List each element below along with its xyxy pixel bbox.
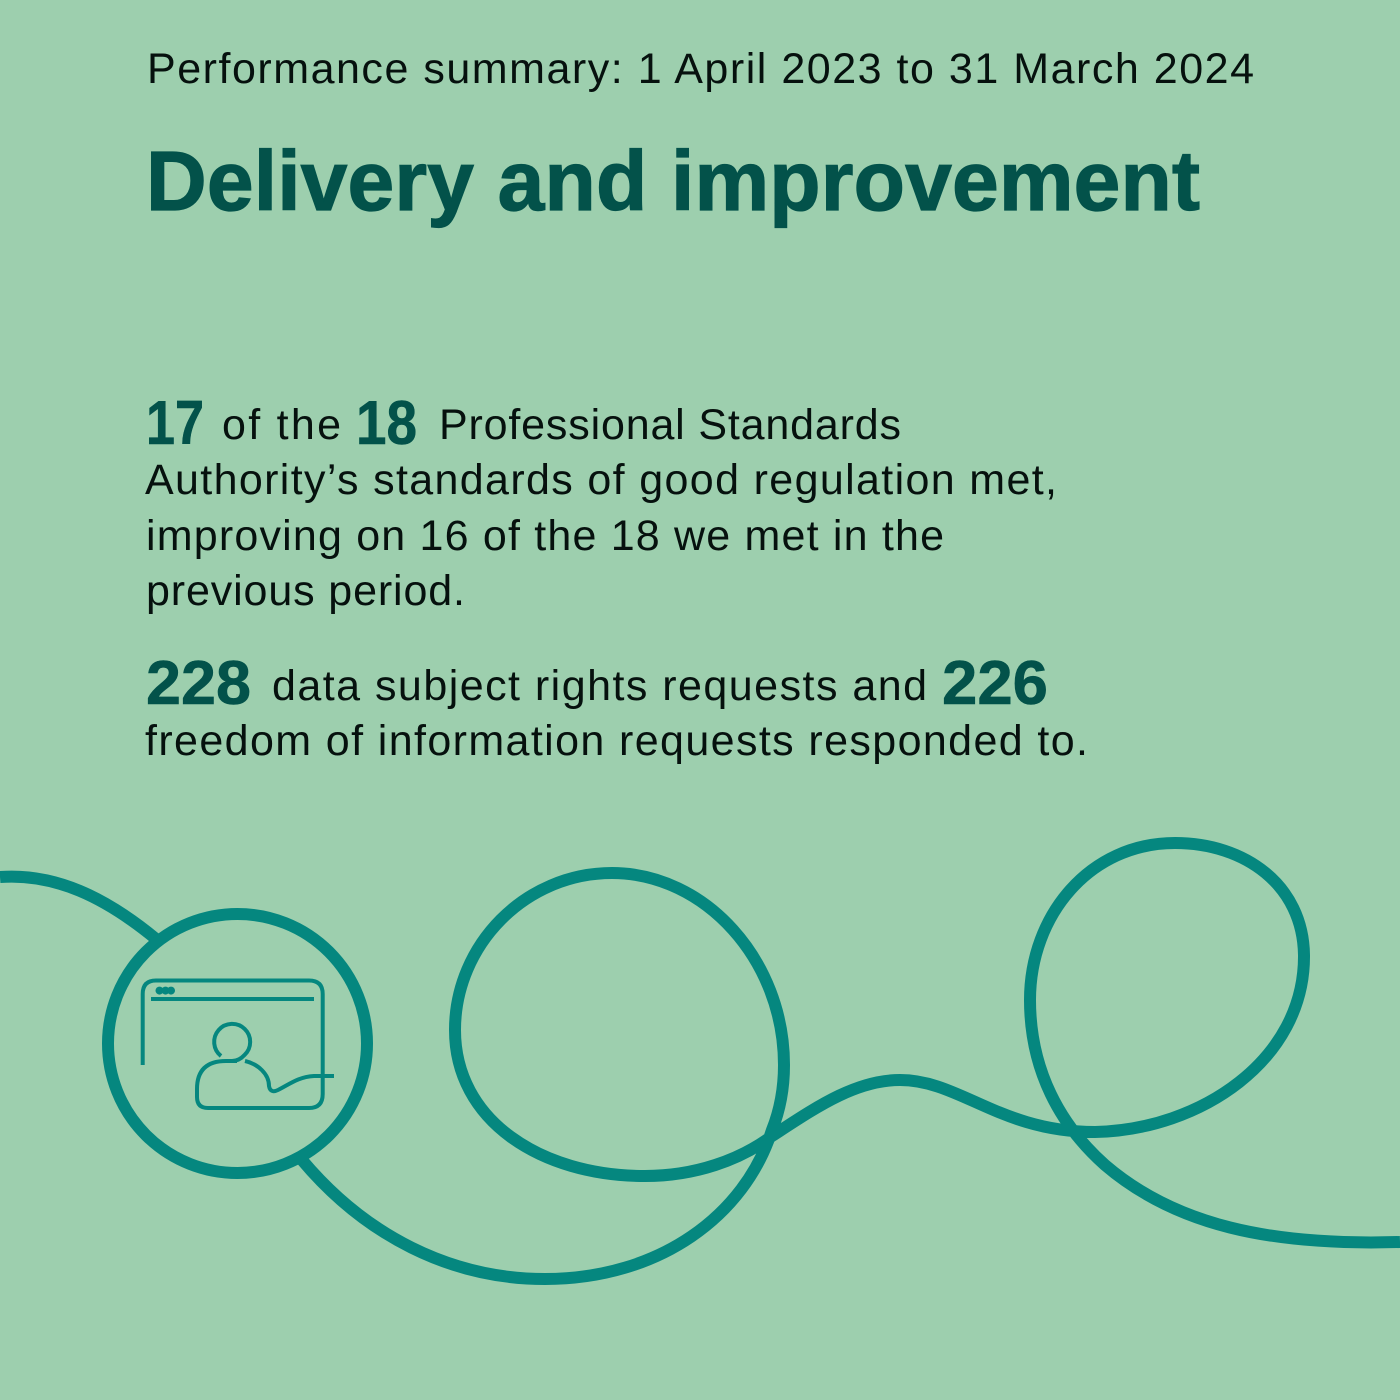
title: Delivery and improvement: [146, 134, 1200, 228]
stat: 17: 17: [146, 389, 204, 458]
person head: [214, 1024, 250, 1061]
text block: information requests: [145, 649, 1088, 765]
stat: 226: 226: [942, 649, 1048, 718]
text line 2: Authority’s standards of good regulation met,: [145, 456, 1057, 504]
stat: 18: 18: [356, 389, 417, 458]
text line 4: previous period.: [146, 567, 465, 615]
browser toolbar line: [151, 997, 314, 1001]
icon: person at browser window in circle: [108, 914, 367, 1173]
decorative looping line: [0, 843, 1400, 1279]
browser dots: [156, 987, 175, 995]
text: data subject rights requests and: data subject rights requests and: [272, 662, 927, 710]
text: of the: of the: [222, 401, 341, 449]
browser window outline: [143, 980, 323, 1108]
text line 2: freedom of information requests responded to.: [145, 717, 1088, 765]
text block: standards of good regulation: [145, 389, 1057, 615]
text line 3: improving on 16 of the 18 we met in the: [146, 512, 944, 560]
text: Professional Standards: Professional Standards: [439, 401, 901, 449]
stat: 228: 228: [146, 649, 251, 718]
circle: [108, 914, 367, 1173]
person shoulder and wave: [245, 1061, 334, 1091]
subtitle: Performance summary: 1 April 2023 to 31 March 2024: [147, 45, 1254, 93]
